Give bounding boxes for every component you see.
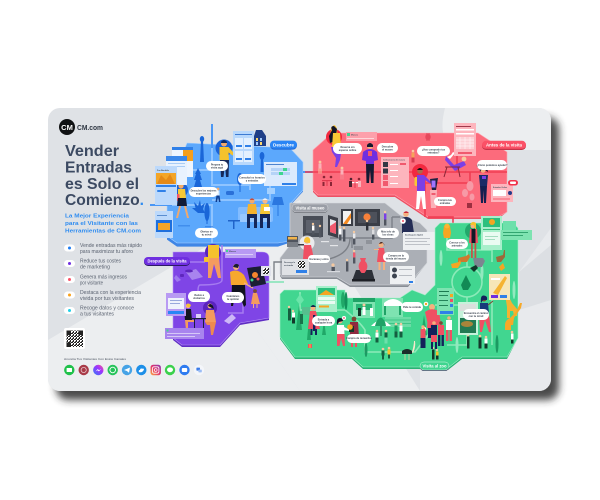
icon: building xyxy=(254,130,266,146)
bubbles: red: entradas xyxy=(440,202,451,205)
red card: attractions list: Colecciones de museo xyxy=(383,160,406,162)
person: woman with purple trousers xyxy=(326,125,342,167)
person: woman with red coat xyxy=(298,236,314,259)
bubbles: blue: Prepara tu xyxy=(211,164,224,166)
person: woman in red coat xyxy=(308,305,320,335)
benefit: more income: por visitante xyxy=(80,280,103,286)
person: woman with red dress xyxy=(374,242,386,270)
bubbles: blue: y entradas xyxy=(246,180,259,182)
icon: gift and floating badges xyxy=(308,302,428,348)
person: staff with tiger mask xyxy=(347,317,359,347)
purple card: survey top: Museo xyxy=(229,251,237,253)
blue connecting paths xyxy=(150,124,313,243)
bubbles: red: el museo xyxy=(382,148,393,152)
icon: phone xyxy=(247,266,271,287)
red region shape xyxy=(313,133,507,219)
tag: antes de la visita xyxy=(482,141,526,150)
gray card: ticket QR xyxy=(282,259,309,275)
bubbles: purple: Cuéntanos xyxy=(227,295,240,298)
red card: event notice xyxy=(346,132,377,141)
bubbles: red: esperas online xyxy=(339,149,357,152)
person: man in yellow shirt xyxy=(230,264,253,307)
tag: descubre: Descubre xyxy=(273,142,294,147)
bubbles: green: Compra de recuerdos xyxy=(346,337,373,340)
bubbles: blue: Descubre las mejores xyxy=(191,190,217,192)
red card: payment xyxy=(491,184,513,202)
blue region shape xyxy=(167,143,303,247)
bubbles: green: cualquier hora xyxy=(315,322,333,324)
gray card: ticket QR: entrada xyxy=(284,264,294,267)
bubbles: red: Descubre xyxy=(382,146,394,148)
bubbles: gray: Más info de xyxy=(381,230,395,234)
purple card: message xyxy=(165,328,204,339)
bubbles: red xyxy=(333,143,508,206)
green connecting paths xyxy=(300,224,492,352)
bubbles: purple: visitarnos xyxy=(193,297,206,300)
bubbles: green: Pide tu comida xyxy=(403,306,421,309)
museum paintings xyxy=(303,209,380,238)
title: Vender xyxy=(65,143,119,160)
title: Comienzo. xyxy=(65,192,144,209)
logo: CM.com: CM xyxy=(61,123,73,132)
bubbles: blue: visita aquí xyxy=(211,166,223,170)
bubbles: gray: tienda del museo xyxy=(386,258,407,260)
green card: list xyxy=(437,288,454,315)
subtitle xyxy=(65,214,141,234)
bubbles: gray xyxy=(308,228,409,263)
subtitle: La Mejor Experiencia xyxy=(65,214,130,220)
channel icons xyxy=(64,365,204,375)
purple card: review xyxy=(166,293,186,316)
benefit: sell tickets xyxy=(64,243,142,255)
logo: CM.com: CM.com xyxy=(77,123,103,132)
person: navy woman with phone xyxy=(479,166,488,203)
blue cards stack: Zoo Bandido xyxy=(157,170,170,172)
person: woman with black dress xyxy=(465,222,481,258)
green booths xyxy=(353,298,411,336)
green card: zoo pass xyxy=(316,286,337,312)
subtitle: para el Visitante con las xyxy=(65,221,138,227)
green card: tiger offer xyxy=(481,216,502,250)
benefit: reduce costs: de marketing xyxy=(80,264,110,270)
benefit: experience: vivida por tus visitantes xyxy=(80,296,135,302)
benefit: data xyxy=(64,306,134,318)
green card: animal info xyxy=(489,274,510,300)
person: man at kiosk xyxy=(412,164,431,209)
bubbles: blue: experiencias xyxy=(196,192,212,196)
purple region shape xyxy=(173,252,269,347)
green region shape xyxy=(280,223,518,370)
icon: red ticket badge xyxy=(508,180,518,186)
benefits list xyxy=(64,243,142,318)
person: woman in white shirt xyxy=(337,318,350,346)
gray card: ticket QR: Descarga la xyxy=(284,262,296,264)
bubbles: green xyxy=(312,239,489,343)
blue card: calendar xyxy=(264,162,297,186)
person: carrying bags xyxy=(204,244,221,278)
tag: visita al museo xyxy=(292,204,328,213)
benefit: experience: Destaca con la experiencia xyxy=(80,290,141,296)
title: Entradas xyxy=(65,160,132,176)
bubbles: red: Compra tus xyxy=(438,199,453,202)
benefit: reduce costs: Reduce tus costes xyxy=(80,258,121,264)
red small people and tables xyxy=(318,133,431,188)
red card: event notice: Museo xyxy=(351,134,359,136)
subtitle: Herramientas de CM.com xyxy=(65,228,141,234)
bubbles: blue xyxy=(189,161,266,238)
person: woman with navy top xyxy=(479,295,493,332)
small zoo visitors xyxy=(288,306,514,360)
gray region shape xyxy=(280,203,427,287)
bubbles: green: animales xyxy=(452,244,463,248)
bubbles: green: Encuentra el camino xyxy=(464,312,489,315)
bubbles: green: Entrada a xyxy=(318,318,330,322)
gray connecting paths xyxy=(274,217,400,280)
background card xyxy=(48,108,551,391)
bubbles: gray: las obras xyxy=(383,234,394,236)
panel: descubre (blue) xyxy=(150,124,313,247)
bubbles: green: con tu móvil xyxy=(469,315,484,318)
QR code xyxy=(64,328,85,349)
bubbles: red: ¿Cómo podemos ayudar? xyxy=(477,164,508,167)
bubbles: purple: Vuelve a xyxy=(194,294,205,297)
tag: visita al museo: Visita al museo xyxy=(296,206,325,211)
icon: potted plant xyxy=(462,181,474,208)
icon: ticket kiosk xyxy=(430,178,438,208)
people: couple on sofa xyxy=(247,198,270,228)
benefit: more income: Genera más ingresos xyxy=(80,274,127,280)
person: man with navy jacket xyxy=(400,211,414,247)
panel: visita al museo (gray) xyxy=(274,203,437,287)
bubbles: purple: tu opinión xyxy=(227,298,240,301)
benefit: sell tickets: para maximizar tu aforo xyxy=(80,249,133,255)
red connecting paths xyxy=(305,140,507,226)
title xyxy=(65,143,144,209)
giraffes xyxy=(505,293,522,330)
tag: descubre xyxy=(270,141,297,150)
bubbles: red: Reserva sin xyxy=(340,146,355,149)
bubbles: blue: Consulta los horarios xyxy=(239,176,265,180)
bubbles: red: entradas? xyxy=(428,152,440,154)
bubbles: gray: Compra en la xyxy=(388,254,405,258)
purple connecting paths xyxy=(190,245,284,313)
red card: payment: Entradas Online xyxy=(493,186,508,189)
icon: red vase on plinth xyxy=(352,258,375,282)
person: sitting with laptop xyxy=(444,152,466,177)
person: presenter man xyxy=(216,140,238,177)
card shadow xyxy=(56,117,559,400)
tag: visita al zoo xyxy=(420,362,449,371)
benefit: experience xyxy=(64,290,141,302)
benefit: sell tickets: Vende entradas más rápido xyxy=(80,243,142,249)
bubbles: blue: Ofertas en xyxy=(200,230,213,234)
tag: visita al zoo: Visita al zoo xyxy=(422,364,447,369)
gray card: comment: Audioguía digital xyxy=(405,234,423,236)
bubbles: green: Conoce a los xyxy=(449,242,465,244)
bubbles: red: ¿Has comprado tus xyxy=(422,148,446,152)
bubbles: purple xyxy=(188,291,244,303)
tag: antes de la visita: Antes de la visita xyxy=(486,143,522,148)
people: family group xyxy=(420,304,452,349)
panel: después de la visita (purple) xyxy=(144,244,284,347)
blue trees and plants xyxy=(178,136,264,227)
blue cards stack xyxy=(155,147,193,238)
benefit: more income xyxy=(64,274,127,286)
person: woman walking xyxy=(174,183,189,218)
person: small walker xyxy=(216,188,220,202)
sofa and lamp xyxy=(226,188,284,229)
green trees xyxy=(296,250,516,357)
bubbles: gray: Escanea y entra xyxy=(309,258,329,261)
person: child xyxy=(251,289,260,308)
title: es Solo el xyxy=(65,176,139,193)
bubbles: blue: tu móvil xyxy=(202,234,212,236)
purple decor xyxy=(174,269,236,324)
gray card: audio list xyxy=(390,266,415,284)
red card: calendar xyxy=(454,123,476,156)
tag: después de la visita: Después de la visita xyxy=(148,259,187,264)
animals xyxy=(402,224,505,360)
benefit: data: a tus visitantes xyxy=(80,312,115,318)
benefit: reduce costs xyxy=(64,258,121,270)
visitors xyxy=(287,211,386,272)
green card: map xyxy=(458,302,478,335)
gray card: comment xyxy=(403,232,437,250)
green card: news note xyxy=(501,221,532,240)
panel: visita al zoo (green) xyxy=(280,216,532,371)
panel: antes de la visita (red) xyxy=(305,123,526,226)
people: couple at table xyxy=(184,301,217,335)
blue card: brochure xyxy=(233,131,254,165)
logo: CM.com xyxy=(59,119,103,135)
channels caption: Anuncia Tus Visitantes Con Estos Canales xyxy=(64,357,126,361)
red card: attractions list xyxy=(381,157,409,188)
person: man purple shirt xyxy=(362,143,378,183)
benefit: data: Recoge datos y conoce xyxy=(80,306,134,312)
